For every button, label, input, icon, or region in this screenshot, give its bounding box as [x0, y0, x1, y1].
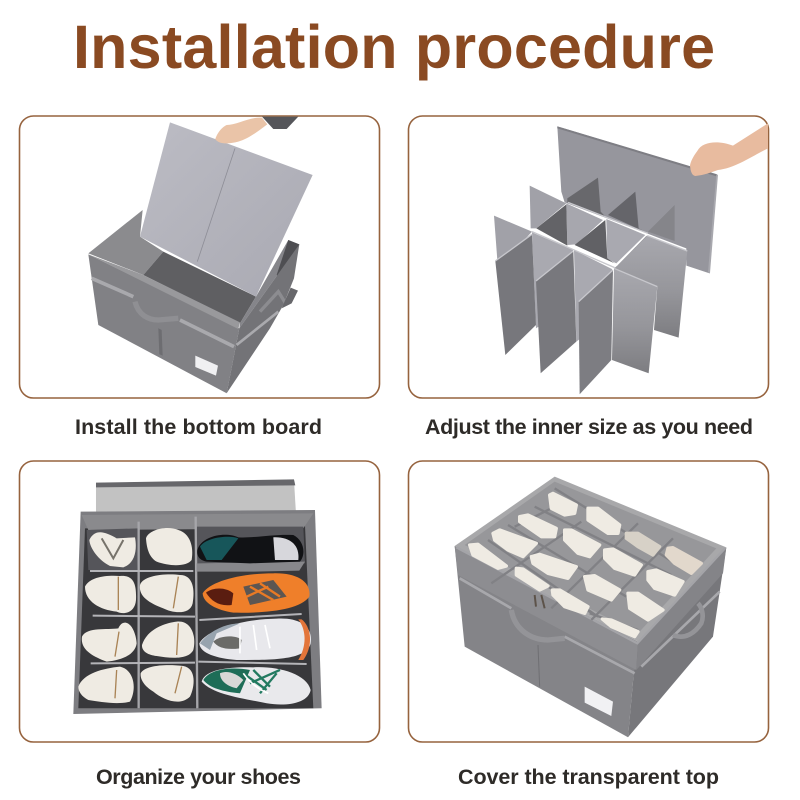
panel: adjust the inner size	[408, 116, 768, 398]
caption: cover the transparent top: Cover the transparent top	[458, 765, 719, 789]
rolled shoes	[470, 493, 701, 637]
shoe: white and green	[202, 667, 311, 705]
middle row panels	[532, 232, 575, 328]
caption: organize your shoes: Organize your shoes	[96, 765, 301, 789]
illustration: box top view with shoes	[73, 479, 322, 714]
panel: organize your shoes	[20, 461, 380, 742]
box interior	[88, 210, 299, 328]
right panels	[614, 236, 687, 338]
shoe: white and orange	[199, 619, 311, 660]
white shoes	[78, 528, 194, 703]
caption: adjust the inner size: Adjust the inner size as you need	[425, 415, 753, 439]
panel: cover the transparent top	[408, 461, 768, 742]
caption: install the bottom board: Install the bottom board	[75, 415, 322, 439]
lid interior	[455, 477, 726, 643]
dark cells	[536, 178, 675, 272]
illustration: closed box with clear lid	[455, 477, 726, 737]
hand	[215, 117, 298, 143]
illustration: open box with bottom board	[88, 117, 313, 393]
front fold panels	[495, 234, 536, 355]
bottom board	[140, 122, 313, 297]
shoe: black and teal	[197, 535, 303, 563]
lid	[96, 479, 296, 513]
illustration: grid dividers	[494, 123, 768, 394]
middle board left side	[530, 186, 566, 228]
shoe: orange	[203, 573, 310, 613]
panel: install the bottom board	[20, 116, 380, 398]
box faces	[455, 546, 726, 737]
compartment rows	[87, 527, 305, 570]
back board	[557, 126, 717, 273]
title: Installation procedure	[73, 13, 715, 81]
divider lines	[139, 517, 197, 708]
box body	[73, 510, 322, 714]
trim, handle and label	[460, 578, 720, 716]
hand	[690, 123, 768, 176]
box exterior	[88, 244, 299, 393]
